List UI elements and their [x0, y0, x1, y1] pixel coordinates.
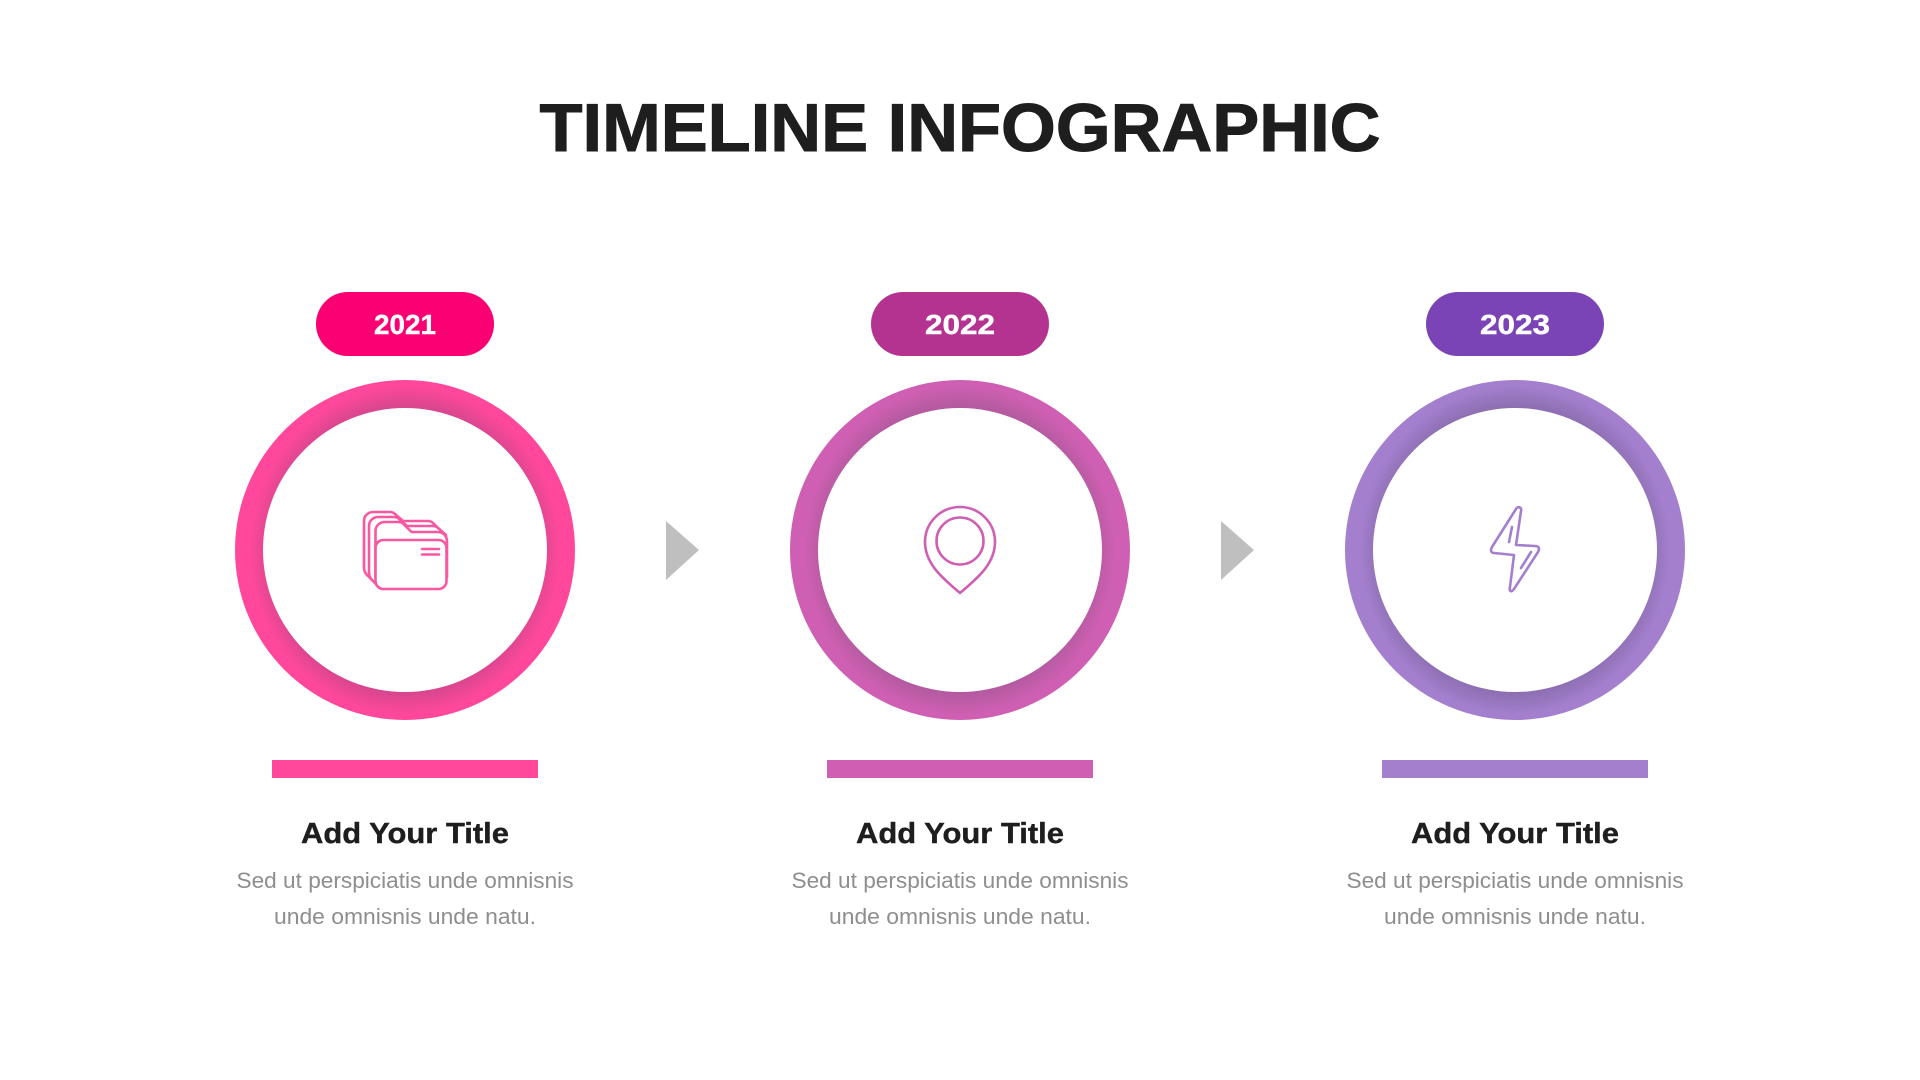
year pill: 2021 — [316, 292, 494, 356]
panel: 2021 — [235, 292, 575, 929]
accent bar: 2023 — [1382, 760, 1648, 778]
item title: 2021: Add Your Title — [301, 818, 509, 850]
item text: 2023: unde omnisnis unde natu. — [1384, 904, 1646, 929]
item title: 2022: Add Your Title — [856, 818, 1064, 850]
icon: folders — [364, 512, 447, 589]
arrow 2 — [1221, 521, 1254, 580]
accent bar: 2021 — [272, 760, 538, 778]
panel: 2022 — [790, 292, 1130, 929]
item text: 2023 — [1346, 868, 1684, 929]
icon: map pin — [925, 507, 995, 593]
year pill: 2022: 2022 — [925, 309, 995, 340]
item text: 2022: Sed ut perspiciatis unde omnisnis — [792, 868, 1128, 893]
arrow 1 — [666, 521, 699, 580]
item text: 2023: Sed ut perspiciatis unde omnisnis — [1346, 868, 1684, 893]
item text: 2021: unde omnisnis unde natu. — [274, 904, 536, 929]
item title: 2023: Add Your Title — [1411, 818, 1619, 850]
ring: 2021 — [235, 380, 575, 720]
item text: 2021: Sed ut perspiciatis unde omnisnis — [236, 868, 574, 893]
item text: 2022: unde omnisnis unde natu. — [829, 904, 1091, 929]
year pill: 2023 — [1426, 292, 1604, 356]
year pill: 2023: 2023 — [1480, 309, 1550, 340]
item text: 2022 — [792, 868, 1128, 929]
year pill: 2022 — [871, 292, 1049, 356]
title: TIMELINE INFOGRAPHIC — [540, 90, 1380, 166]
ring: 2023 — [1345, 380, 1685, 720]
accent bar: 2022 — [827, 760, 1093, 778]
ring: 2022 — [790, 380, 1130, 720]
year pill: 2021: 2021 — [374, 309, 436, 340]
panel: 2023 — [1345, 292, 1685, 929]
icon: lightning bolt — [1491, 507, 1539, 591]
item text: 2021 — [236, 868, 574, 929]
